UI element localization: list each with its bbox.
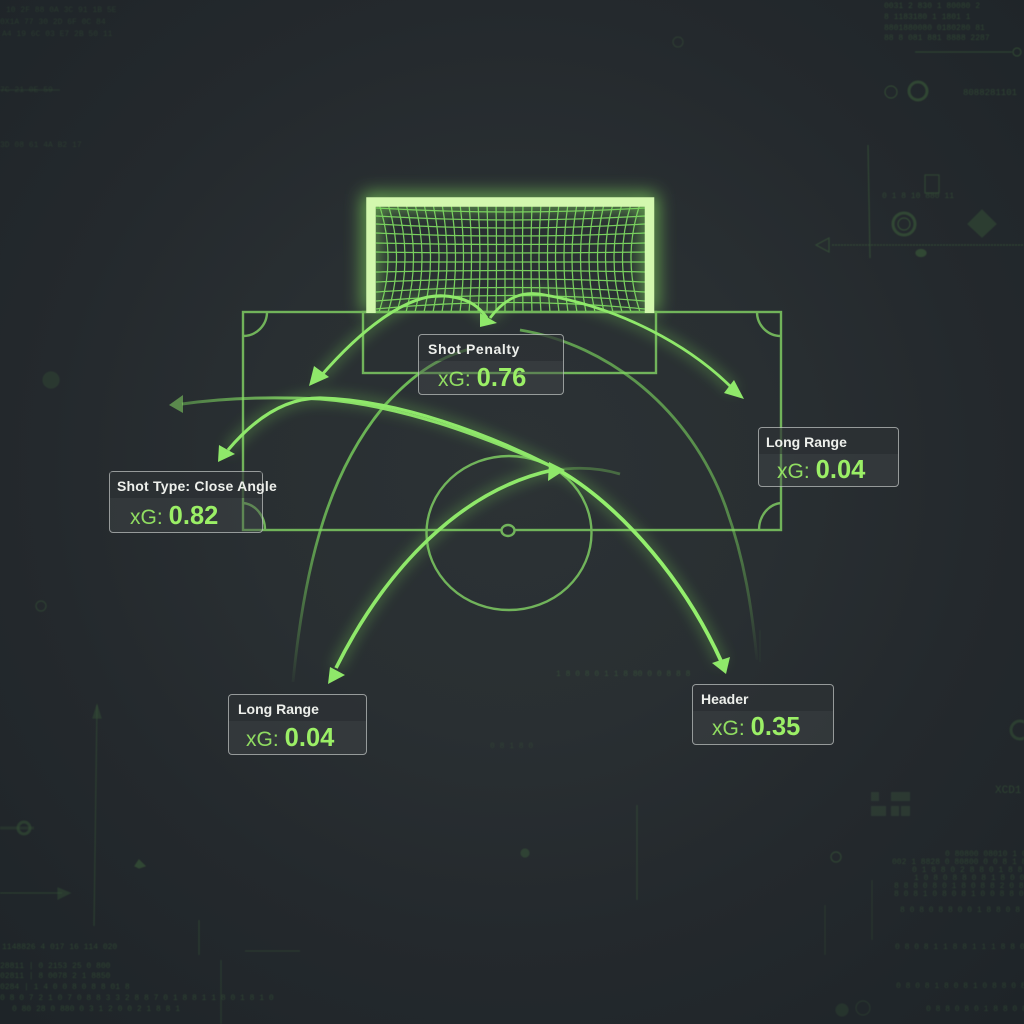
penalty area outline xyxy=(243,312,781,530)
callout: long range lower: Long Range xyxy=(238,701,319,717)
callout: close angle: Shot Type: Close Angle xyxy=(117,478,277,494)
faint data text top right: 8088281101 xyxy=(963,88,1017,98)
callout: long range lower xyxy=(228,694,367,755)
faint data text top right: 0 1 8 10 880 11 xyxy=(882,192,954,201)
faint data text bottom right xyxy=(892,785,1024,1014)
faint schematic shapes: 1 8 0 8 0 1 1 8 80 0 0 8 8 8 xyxy=(556,670,691,679)
faint data text bottom left: 02811 | 8 0078 2 1 8850 xyxy=(0,972,111,981)
faint data text top left: 7C 21 0E 59 xyxy=(0,86,53,95)
callout: long range lower: xG:0.04 xyxy=(246,724,334,752)
callout: header: xG:0.35 xyxy=(712,713,800,741)
faint data text bottom left: 0 8 0 7 2 1 0 7 0 8 8 3 3 2 8 8 7 0 1 8 8 1 1 8 0 1 8 1 0 xyxy=(0,994,274,1003)
faded trajectory arcs xyxy=(293,330,757,682)
callout: shot penalty xyxy=(418,334,564,395)
goal frame xyxy=(371,202,650,313)
callout: shot penalty: xG:0.76 xyxy=(438,364,526,392)
faint data text top right: 8 1183180 1 1801 1 xyxy=(884,13,971,22)
faint data text top left: A4 19 6C 03 E7 2B 50 11 xyxy=(2,30,113,39)
six-yard box xyxy=(363,312,656,373)
faint data text top left: 0X1A 77 30 2D 6F 0C 84 xyxy=(0,18,106,27)
faint data text top right: 8801880080 0180280 81 xyxy=(884,24,985,33)
faint data text bottom left: 28811 | 0 2153 25 0 800 xyxy=(0,962,111,971)
callout: header xyxy=(692,684,834,745)
centre spot xyxy=(502,525,514,536)
faint schematic shapes: 0 8 1 8 0 xyxy=(490,742,533,751)
goal glow xyxy=(370,201,650,312)
left faded arc xyxy=(293,349,470,682)
arrow: goal to left xyxy=(320,296,487,377)
faint data text bottom left: 0 80 28 0 880 0 3 1 2 0 0 2 1 8 8 1 xyxy=(12,1005,180,1014)
faint data text top right: 88 8 081 881 8888 2287 xyxy=(884,34,990,43)
callout: long range right xyxy=(758,427,899,487)
right faded arc xyxy=(520,330,757,660)
callout: close angle: xG:0.82 xyxy=(130,502,218,530)
faint data text bottom left xyxy=(0,943,274,1014)
callout: long range right: xG:0.04 xyxy=(777,456,865,484)
shot arrows xyxy=(182,294,734,668)
main diagram xyxy=(169,181,782,684)
faint data text bottom left: 0284 | 1 4 0 0 8 0 8 8 01 8 xyxy=(0,983,130,992)
faint data text top left: 10 2F 88 0A 3C 91 1B 5E xyxy=(6,6,117,15)
arrowheads xyxy=(169,313,744,684)
callout: shot penalty: Shot Penalty xyxy=(428,341,520,357)
callout: close angle xyxy=(109,471,263,533)
faint data text top left: 3D 08 61 4A B2 17 xyxy=(0,141,82,150)
arrow: goal to long range right xyxy=(490,294,734,390)
trajectory glow xyxy=(228,294,734,668)
arrow: long range lower xyxy=(336,470,553,668)
faint data text bottom left: 1148826 4 017 16 114 020 xyxy=(2,943,117,952)
arrow: long faded crossing shot xyxy=(182,398,553,467)
centre circle xyxy=(426,456,592,610)
corner arcs xyxy=(243,312,781,530)
arrow: header xyxy=(553,467,722,663)
faint data text top right xyxy=(882,2,1017,201)
pitch markings xyxy=(243,312,781,610)
faint data text top left xyxy=(0,6,117,150)
faint trail past the centre xyxy=(556,468,620,474)
callout: header: Header xyxy=(701,691,748,707)
arrow: close angle curve xyxy=(228,398,553,467)
faint data text bottom right: XCD1 xyxy=(995,785,1022,797)
goal net xyxy=(376,204,645,312)
callout: long range right: Long Range xyxy=(766,434,847,450)
faint data text top right: 0031 2 830 1 80080 2 xyxy=(884,2,980,11)
